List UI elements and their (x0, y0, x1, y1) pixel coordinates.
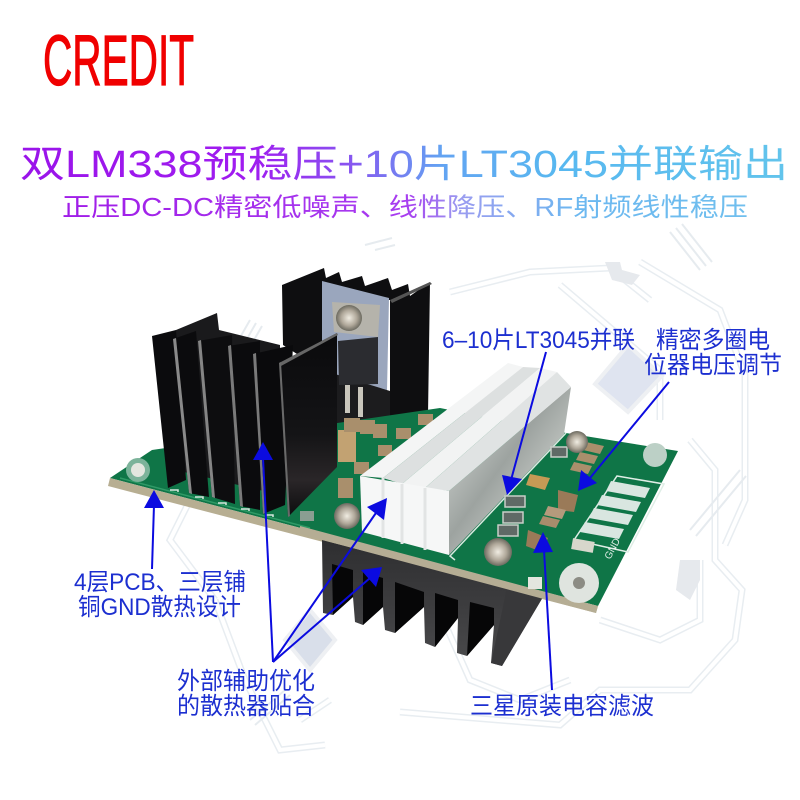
black finned heatsink (152, 313, 338, 517)
circuit board top (110, 408, 678, 606)
arrow: potentiometer (578, 382, 669, 491)
silkscreen labels: GND (603, 537, 623, 561)
background circuit pattern (170, 224, 746, 750)
label: potentiometer (644, 327, 782, 379)
label: external heatsink (177, 668, 315, 720)
arrow: 4-layer PCB (144, 490, 164, 569)
label: external heatsink: 外部辅助优化 (177, 668, 315, 695)
label: 6-10 LT3045: 6–10片LT3045并联 (442, 327, 635, 354)
bottom finned heatsink (322, 540, 543, 666)
small capacitors behind aluminium heatsink (338, 414, 433, 498)
arrow: heatsink fin (253, 442, 273, 662)
solder pads (580, 481, 650, 539)
label: Samsung capacitors: 三星原装电容滤波 (470, 693, 654, 720)
title: 双LM338预稳压+10片LT3045并联输出 (20, 144, 788, 186)
board edge in front of bottom heatsink (300, 526, 598, 613)
board front edge (108, 478, 598, 613)
label: 4-layer PCB: 4层PCB、三层铺 (74, 569, 246, 596)
board left traces and mounting hole (120, 458, 314, 528)
label: 4-layer PCB (74, 569, 246, 621)
logo: CREDIT: CREDIT (43, 22, 194, 101)
screws and holes (334, 503, 360, 529)
label: potentiometer: 精密多圈电 (656, 327, 770, 354)
product photo: voltage regulator board (108, 268, 678, 666)
white aluminium heatsink (360, 363, 571, 555)
arrow: capacitors (533, 532, 553, 690)
arrow: LT3045 (502, 352, 546, 495)
label: potentiometer: 位器电压调节 (644, 352, 782, 379)
label: external heatsink: 的散热器贴合 (177, 693, 315, 720)
board right section components (334, 431, 667, 603)
rear heatsink with regulator (282, 268, 432, 443)
resistors (498, 447, 567, 536)
arrow: bottom heatsink (273, 567, 382, 662)
subtitle: 正压DC-DC精密低噪声、线性降压、RF射频线性稳压 (62, 194, 748, 222)
capacitors (526, 442, 604, 552)
arrow: aluminium heatsink (273, 498, 387, 662)
label: 4-layer PCB: 铜GND散热设计 (78, 594, 241, 621)
